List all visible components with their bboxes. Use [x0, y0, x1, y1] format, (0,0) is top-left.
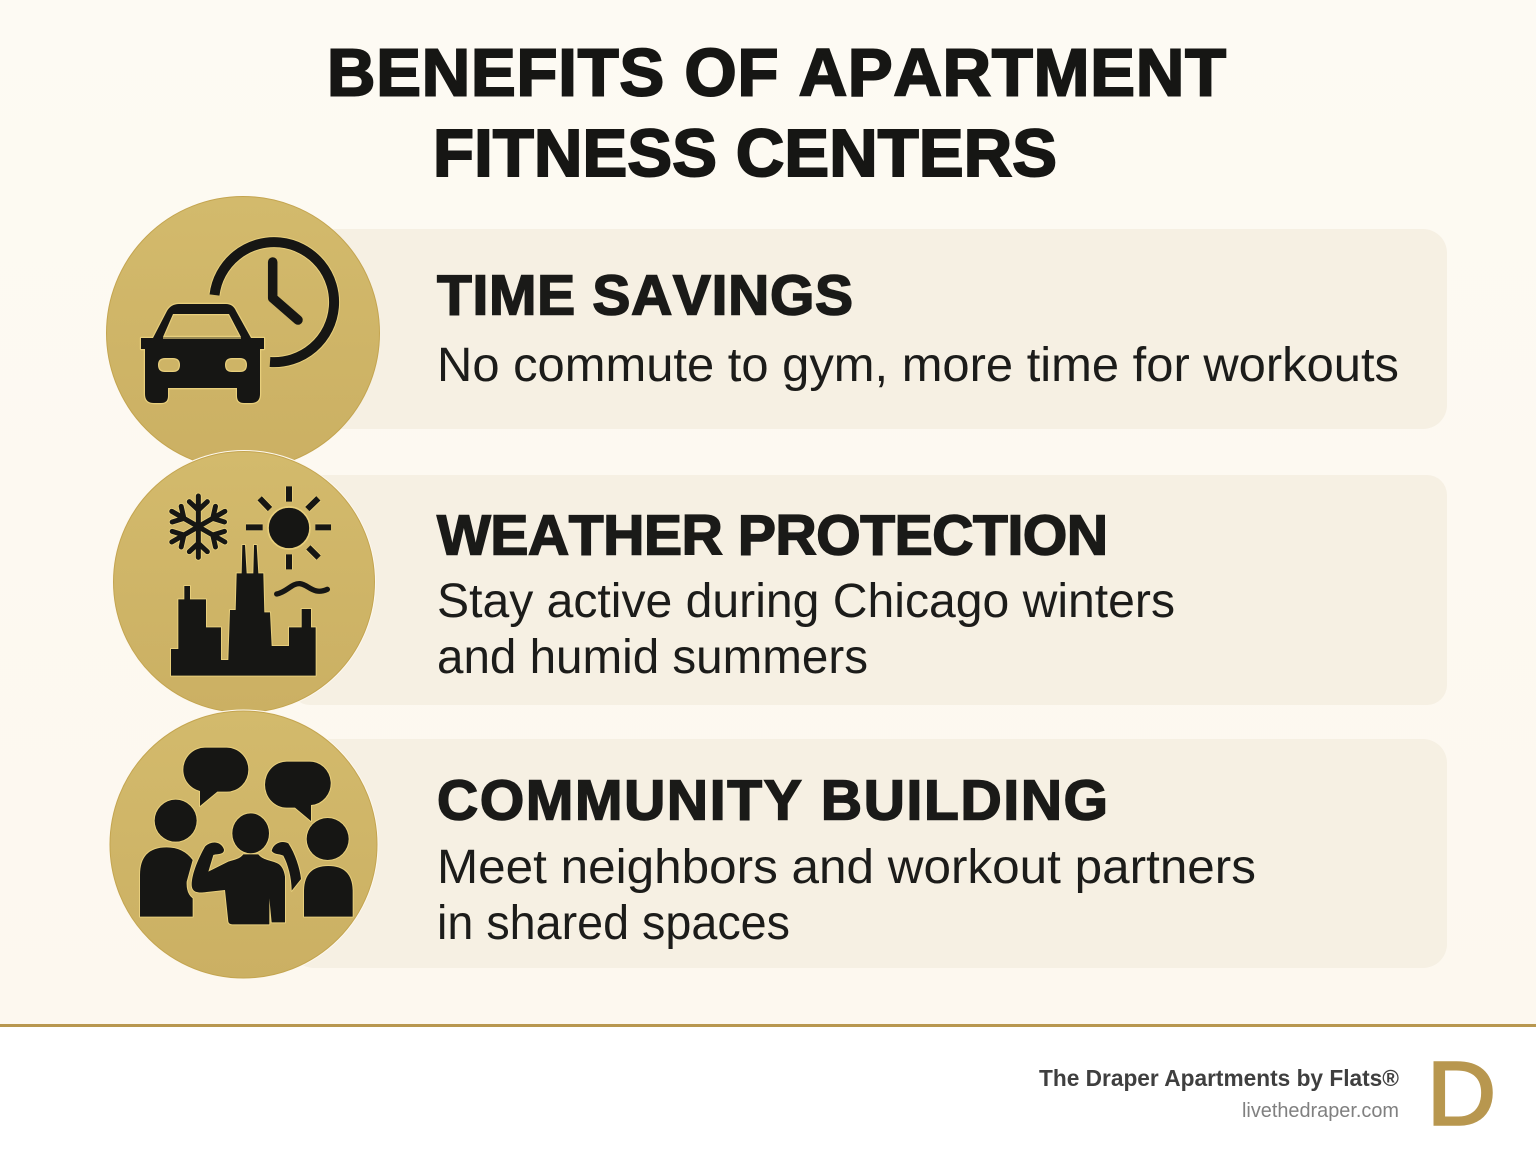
description: weather protection [437, 575, 1175, 684]
heading: time savings: TIME SAVINGS [437, 264, 853, 328]
title: FITNESS CENTERS [433, 116, 1057, 191]
car [141, 304, 264, 403]
icon: snowflake, sun and skyline [112, 450, 376, 714]
sun [246, 486, 331, 569]
person right [304, 818, 353, 917]
description: community building: Meet neighbors and workout partners [437, 841, 1256, 894]
brand name: The Draper Apartments by Flats® [1039, 1065, 1399, 1091]
footer rule [0, 1024, 1536, 1027]
panel background [290, 739, 1447, 968]
description: time savings: No commute to gym, more time for workouts [437, 339, 1399, 392]
panel: time savings [290, 229, 1447, 429]
panel: community building [290, 739, 1447, 968]
icon disc [112, 450, 376, 714]
website: livethedraper.com [1242, 1100, 1399, 1122]
panel: weather protection [290, 475, 1447, 705]
description: community building: in shared spaces [437, 897, 790, 950]
snowflake [167, 496, 229, 557]
icon: car and clock [106, 196, 380, 470]
icon disc [106, 196, 380, 470]
icon: community group [108, 710, 378, 980]
heading: weather protection: WEATHER PROTECTION [437, 504, 1108, 568]
description: community building [437, 841, 1256, 950]
speech bubble left [183, 748, 248, 806]
speech bubble right [265, 762, 331, 821]
footer [0, 1024, 1536, 1154]
person center flexing [192, 813, 301, 924]
panel background [290, 229, 1447, 429]
description: weather protection: Stay active during Chicago winters [437, 575, 1175, 628]
heading: community building: COMMUNITY BUILDING [437, 768, 1108, 832]
panel background [290, 475, 1447, 705]
person left [140, 800, 197, 917]
title [327, 36, 1226, 191]
clock [214, 242, 334, 362]
footer background [0, 1027, 1536, 1154]
description: weather protection: and humid summers [437, 631, 868, 684]
humidity wave [277, 584, 327, 594]
title: BENEFITS OF APARTMENT [327, 36, 1226, 110]
skyline [171, 545, 316, 676]
icon disc [108, 710, 378, 980]
logo: D [1427, 1044, 1496, 1144]
